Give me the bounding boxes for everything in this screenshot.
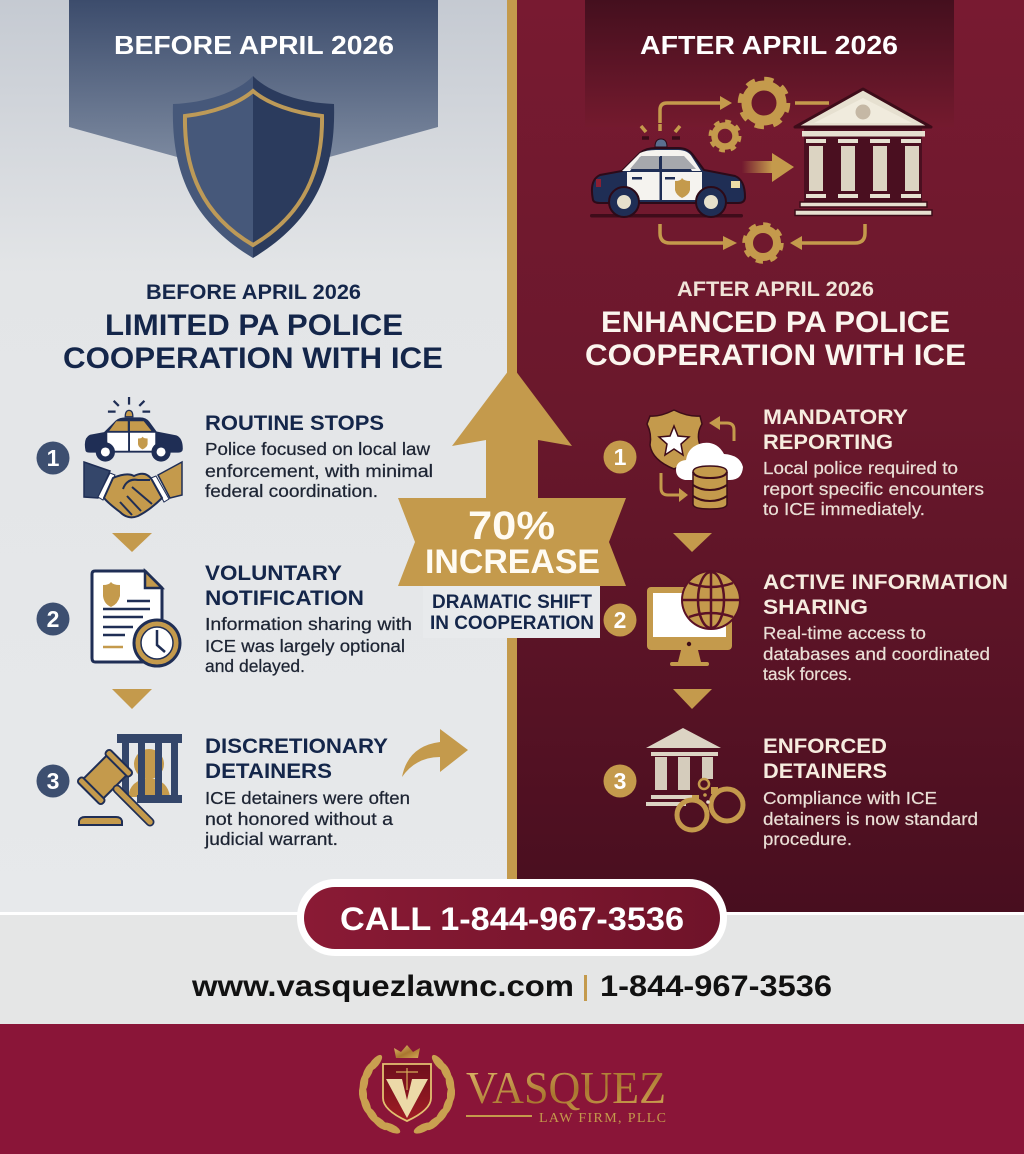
heading: before: LIMITED PA POLICE: [105, 309, 403, 342]
call button: [297, 879, 727, 956]
callout: 70% increase arrow: [398, 366, 626, 638]
step text: not honored without a: [205, 809, 393, 829]
header band: after: [585, 0, 954, 127]
icon: crest: [358, 1045, 456, 1136]
icon: courthouse and handcuffs: [646, 728, 743, 830]
step heading: [763, 406, 908, 454]
icon: police car: [590, 139, 745, 218]
header ribbon: before: [69, 0, 438, 178]
icon: shield: [173, 76, 334, 258]
step heading: ACTIVE INFORMATION: [763, 571, 1008, 594]
step heading: ROUTINE STOPS: [205, 412, 384, 435]
icon: process arrows: [641, 96, 865, 250]
step 3 left: discretionary detainers: [36, 734, 410, 849]
ribbon banner: [398, 498, 626, 586]
header band: after: AFTER APRIL 2026: [640, 30, 898, 60]
contact strip: [0, 912, 1024, 1024]
number badge 3: 3: [614, 768, 626, 794]
big number: 70%: [468, 504, 555, 548]
step heading: [763, 571, 1008, 619]
number badge 1: [36, 442, 70, 474]
heading: before: COOPERATION WITH ICE: [63, 342, 443, 375]
step text: Local police required to: [763, 458, 958, 478]
step heading: ENFORCED: [763, 735, 887, 758]
step text: report specific encounters: [763, 479, 984, 499]
step heading: [205, 562, 364, 610]
step text: enforcement, with minimal: [205, 461, 433, 481]
icon: police car and handshake: [84, 397, 183, 517]
step heading: VOLUNTARY: [205, 562, 342, 585]
caption box: [423, 586, 600, 638]
step text: Information sharing with: [205, 614, 412, 634]
step heading: MANDATORY: [763, 406, 908, 429]
step heading: NOTIFICATION: [205, 587, 364, 610]
step text: [205, 439, 433, 501]
step text: [204, 788, 410, 849]
step heading: SHARING: [763, 596, 868, 619]
footer band: [0, 1024, 1024, 1154]
step text: procedure.: [763, 829, 852, 849]
heading: before: BEFORE APRIL 2026: [146, 281, 361, 304]
call button: CALL 1-844-967-3536: [340, 901, 684, 937]
panel: after (right background): [516, 0, 1024, 914]
step 1 left: routine stops: [36, 397, 433, 517]
step text: and delayed.: [205, 656, 305, 676]
step 3 right: enforced detainers: [604, 728, 978, 849]
icon: government building: [795, 89, 932, 216]
step text: Police focused on local law: [205, 439, 430, 459]
heading: after: [585, 278, 966, 372]
step text: Compliance with ICE: [763, 788, 937, 808]
heading: after: AFTER APRIL 2026: [677, 278, 874, 301]
step 2 left: voluntary notification: [36, 562, 412, 676]
step text: judicial warrant.: [204, 829, 338, 849]
wordmark rule: [466, 1115, 532, 1117]
logo: Vasquez Law Firm: [358, 1045, 666, 1136]
number badge 3: [36, 764, 70, 798]
step text: databases and coordinated: [763, 644, 990, 664]
step text: ICE was largely optional: [205, 636, 405, 656]
step heading: DISCRETIONARY: [205, 735, 388, 758]
step text: task forces.: [763, 664, 852, 684]
label: increase: INCREASE: [425, 543, 600, 581]
caption box: DRAMATIC SHIFT: [432, 592, 592, 613]
panel: before (left background): [0, 0, 508, 914]
step 2 right: active information sharing: [604, 570, 1008, 684]
contact strip: 1-844-967-3536: [600, 970, 832, 1003]
step text: ICE detainers were often: [205, 788, 410, 808]
step text: [763, 623, 990, 684]
step text: to ICE immediately.: [763, 499, 925, 519]
arrow: right step 1 to 2: [673, 533, 712, 552]
tagline: LAW FIRM, PLLC: [539, 1111, 666, 1126]
number badge 2: [604, 604, 636, 636]
number badge 1: [604, 440, 636, 474]
step heading: [205, 735, 388, 783]
number badge 2: [36, 602, 70, 636]
step text: federal coordination.: [205, 481, 378, 501]
icon: badge, cloud and database: [647, 410, 743, 509]
heading: after: ENHANCED PA POLICE: [601, 306, 950, 339]
number badge 1: 1: [47, 445, 60, 471]
arrow: left step 2 to 3: [112, 689, 152, 709]
number badge 1: 1: [614, 444, 627, 470]
step text: [205, 614, 412, 676]
number badge 2: 2: [47, 606, 59, 632]
step heading: DETAINERS: [205, 760, 332, 783]
step text: [763, 458, 984, 519]
heading: after: COOPERATION WITH ICE: [585, 339, 966, 372]
center gold divider: [507, 0, 517, 890]
heading: before: [63, 281, 443, 375]
step heading: DETAINERS: [763, 760, 887, 783]
icon: gears: [710, 80, 788, 262]
step text: [763, 788, 978, 849]
arrow: curved gold: [402, 729, 468, 777]
number badge 3: 3: [47, 768, 59, 794]
wordmark: VASQUEZ: [466, 1062, 666, 1113]
icon: jail bars and gavel: [77, 734, 182, 825]
arrow: left step 1 to 2: [112, 533, 152, 552]
number badge 2: 2: [614, 607, 626, 633]
arrow: up: [452, 366, 572, 500]
number badge 3: [604, 764, 636, 798]
step text: Real-time access to: [763, 623, 926, 643]
step heading: [763, 735, 887, 783]
illustration: police car to government building: [590, 80, 932, 262]
caption box: IN COOPERATION: [430, 613, 594, 634]
step text: detainers is now standard: [763, 809, 978, 829]
step heading: REPORTING: [763, 431, 893, 454]
icon: fade arrow: [742, 153, 794, 182]
arrow: right step 2 to 3: [673, 689, 712, 709]
contact strip: www.vasquezlawnc.com: [191, 970, 574, 1003]
header ribbon: before: BEFORE APRIL 2026: [114, 30, 394, 60]
icon: monitor and globe: [647, 570, 741, 666]
icon: document and clock: [92, 571, 180, 666]
step 1 right: mandatory reporting: [604, 406, 984, 519]
